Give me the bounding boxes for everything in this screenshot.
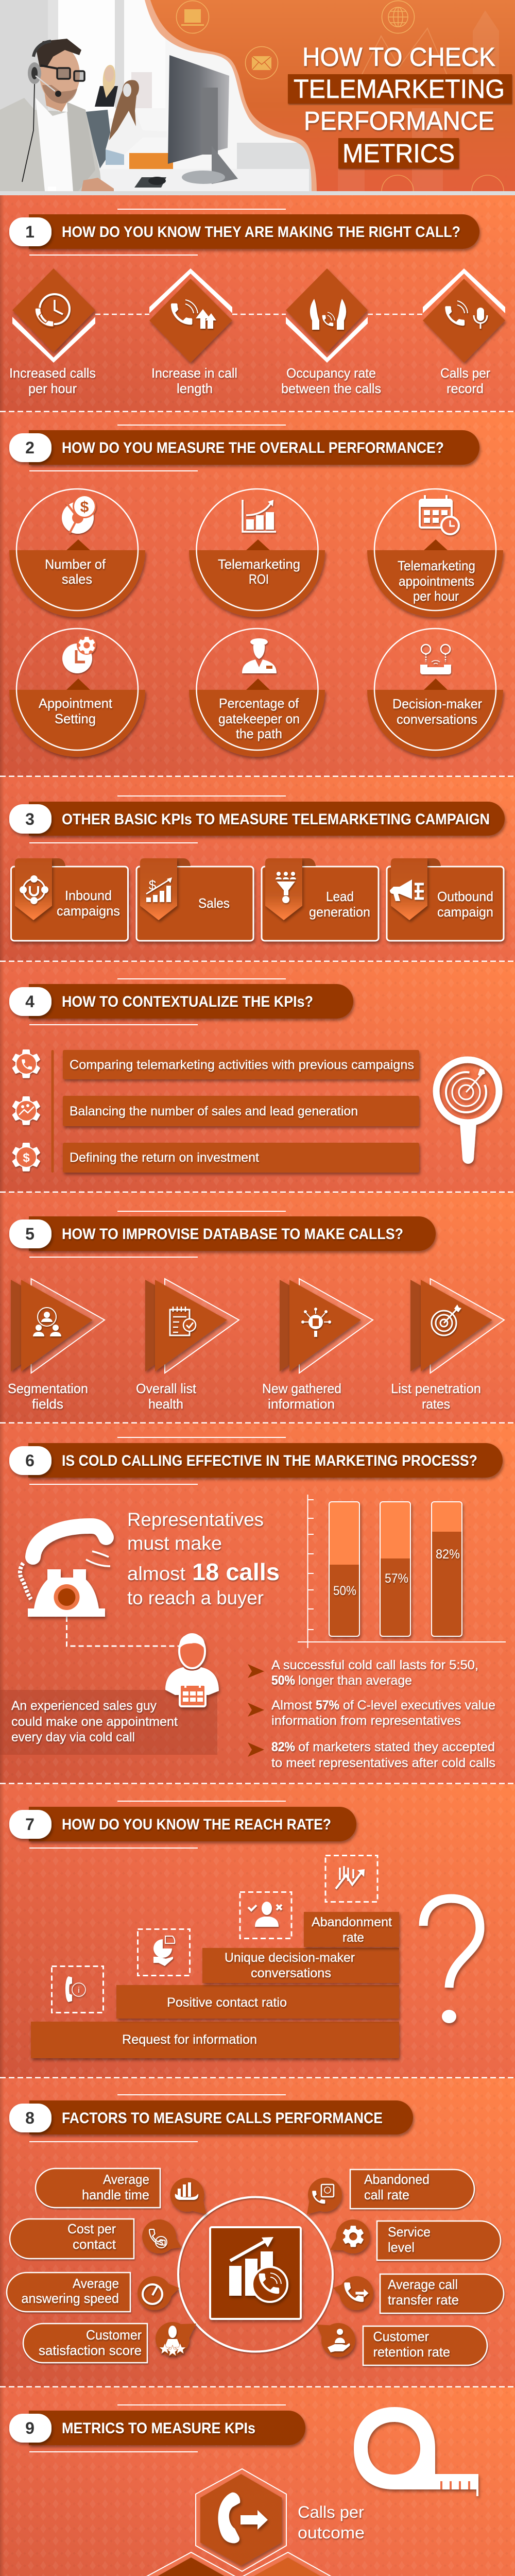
bar chart: cold call stats — [298, 1495, 506, 1648]
factor: customer retention rate: retention rate — [373, 2344, 450, 2360]
icon: envelope badge — [245, 46, 278, 79]
fact: marketers accepted meetings: 82% — [271, 1740, 295, 1754]
icon: gear and wrench — [330, 2219, 370, 2253]
hexagon: calls per outcome: Calls per — [298, 2503, 364, 2521]
callout text: 18 calls to reach a buyer: must make — [127, 1533, 222, 1554]
icon: gear with phone — [12, 1049, 40, 1078]
callout text: 18 calls to reach a buyer: Representatives — [127, 1509, 264, 1530]
item: segmentation fields: Segmentation — [8, 1381, 88, 1396]
item: list penetration rates — [391, 1279, 504, 1412]
card: outbound campaign: Outbound — [437, 889, 493, 904]
bar: 50%: 50% — [333, 1584, 356, 1598]
list item: defining return on investment: Defining the return on investment — [70, 1150, 259, 1165]
item: calls per record: record — [447, 381, 484, 396]
heading 4: 4 — [25, 992, 35, 1011]
orange wave panel — [145, 0, 515, 191]
title: PERFORMANCE — [304, 106, 494, 135]
heading 7: HOW DO YOU KNOW THE REACH RATE? — [62, 1816, 331, 1833]
step: request for information: Request for information — [122, 2032, 257, 2047]
item: increased calls per hour: per hour — [28, 381, 77, 396]
icon: rising chart — [243, 500, 276, 532]
icon: hand holding person — [317, 2323, 355, 2357]
icon: lead funnel — [276, 872, 296, 903]
step: unique decision-maker conversations: conversations — [251, 1966, 331, 1980]
factor: service level: Service — [388, 2224, 431, 2240]
card: appointment setting: Appointment — [39, 696, 113, 711]
panel: section 5 improvise database — [0, 1193, 515, 1423]
factor: cost per contact: Cost per — [67, 2221, 116, 2236]
panel: section 9 metrics — [0, 2387, 515, 2576]
factor: cost per contact — [10, 2219, 181, 2259]
centre circle with chart and phone — [178, 2197, 333, 2351]
card: number of sales — [9, 489, 145, 617]
icon: bars and phone — [229, 2237, 287, 2302]
callout text: 18 calls to reach a buyer: almost — [127, 1563, 186, 1584]
item: increase in call length: Increase in call — [151, 365, 237, 381]
callout panel: experienced sales guy: every day via cold call — [11, 1730, 135, 1744]
step: abandonment rate — [304, 1856, 399, 1947]
fact: successful cold call: A successful cold call lasts for 5:50, — [271, 1658, 478, 1672]
item: increase in call length: length — [177, 381, 213, 396]
factor: customer satisfaction score: Customer — [86, 2327, 142, 2343]
heading 6: 6 — [25, 1451, 35, 1470]
item: occupancy rate — [281, 268, 381, 396]
callout panel: experienced sales guy: could make one appointment — [11, 1715, 178, 1729]
title: TELEMARKETING — [294, 74, 505, 104]
heading 3: 3 — [25, 810, 35, 828]
heading 5: HOW TO IMPROVISE DATABASE TO MAKE CALLS? — [62, 1226, 403, 1243]
item: overall list health: health — [148, 1396, 183, 1412]
hexagon: call to close ratio — [242, 2552, 421, 2576]
item: overall list health — [136, 1279, 239, 1412]
icon: measuring tape — [354, 2407, 478, 2496]
icon: phone with arrow — [218, 2493, 268, 2543]
icon: speedometer — [138, 2276, 179, 2310]
step: abandonment rate: Abandonment — [312, 1915, 392, 1929]
heading 7: 7 — [25, 1815, 35, 1834]
header banner — [0, 0, 515, 191]
card: telemarketing appointments per hour: appointments — [399, 573, 474, 589]
heading 6 — [9, 1437, 503, 1484]
factor: average call transfer rate: transfer rate — [388, 2292, 459, 2308]
heading 8: 8 — [25, 2109, 35, 2127]
icon: rotary telephone — [20, 1526, 110, 1617]
item: increased calls per hour — [9, 268, 96, 396]
fact: successful cold call — [248, 1658, 478, 1688]
callout text: 18 calls to reach a buyer — [127, 1509, 280, 1608]
list item: balancing sales and lead generation: Balancing the number of sales and lead generation — [70, 1104, 358, 1118]
item: increased calls per hour: Increased calls — [9, 365, 96, 381]
list item: comparing activities: Comparing telemarketing activities with previous campaigns — [70, 1058, 414, 1072]
icon: clock and gear — [62, 635, 96, 673]
heading 9: 9 — [25, 2419, 35, 2437]
fact: C-level executives — [248, 1698, 495, 1728]
panel: section 1 right call — [0, 195, 515, 412]
panel: section 6 cold calling — [0, 1423, 515, 1784]
card: appointment setting — [9, 629, 145, 757]
fact: successful cold call: 50% — [271, 1673, 295, 1688]
icon: decision makers on phone — [420, 645, 451, 674]
icon: calendar and clock — [420, 495, 459, 534]
icon: phone with rising arrows — [171, 300, 216, 329]
card: appointment setting: Setting — [55, 711, 96, 726]
heading 8 — [9, 2095, 413, 2142]
item: segmentation fields — [8, 1279, 105, 1412]
item: calls per record — [423, 268, 505, 396]
title: HOW TO CHECK — [302, 42, 495, 72]
card: sales: Sales — [198, 895, 230, 911]
icon: magnifier with target — [436, 1060, 499, 1164]
bar: 57% — [380, 1502, 410, 1636]
card: percentage of gatekeeper on the path: the path — [236, 726, 282, 741]
heading 6: IS COLD CALLING EFFECTIVE IN THE MARKETING PROCESS? — [62, 1452, 477, 1469]
callout panel: experienced sales guy: An experienced sales guy — [11, 1699, 157, 1713]
icon: falling chart in dashed box — [325, 1856, 377, 1902]
bar: 82% — [432, 1502, 462, 1636]
heading 3 — [9, 796, 505, 843]
factor: average handle time: handle time — [82, 2187, 149, 2202]
fact: C-level executives: information from representatives — [271, 1714, 461, 1728]
decorative chart lines — [338, 10, 499, 191]
callout panel: experienced sales guy — [0, 1690, 217, 1755]
photo: call centre agent at desk — [0, 0, 319, 191]
icon: info phone in dashed box: i — [78, 1986, 80, 1995]
card: outbound campaign: campaign — [437, 904, 493, 920]
icon: target — [432, 1304, 461, 1335]
hexagon: calls per outcome — [196, 2469, 365, 2571]
bar: 57%: 57% — [385, 1571, 408, 1586]
heading 1 — [9, 209, 479, 255]
icon: hands and phone — [310, 299, 346, 330]
icon: pie and handshake in dashed box — [138, 1929, 190, 1975]
icon: hand and bars — [170, 2178, 206, 2214]
icon: gear with people chart — [12, 1096, 40, 1125]
card: decision-maker conversations: Decision-maker — [392, 696, 482, 711]
fact: C-level executives: 57% — [316, 1698, 339, 1713]
factor: customer retention rate — [317, 2323, 487, 2365]
icon: checklist — [170, 1307, 196, 1335]
factor: service level — [330, 2219, 501, 2260]
icon: phone with smile bubble — [307, 2178, 342, 2214]
item: calls per record: Calls per — [440, 365, 490, 381]
icon: pie and dollar — [62, 495, 96, 534]
icon: phone and clock — [35, 294, 70, 327]
card: telemarketing ROI: Telemarketing — [218, 556, 300, 572]
heading 1: 1 — [25, 223, 35, 241]
card: sales — [136, 858, 253, 941]
icon: dollar and bars: $ — [149, 877, 157, 893]
heading 8: FACTORS TO MEASURE CALLS PERFORMANCE — [62, 2110, 383, 2127]
card: lead generation: generation — [309, 904, 370, 920]
factor: abandoned call rate: Abandoned — [364, 2172, 430, 2187]
heading 4 — [9, 979, 353, 1025]
factor: abandoned call rate — [307, 2170, 474, 2214]
card: inbound campaigns — [11, 858, 128, 941]
icon: target people — [33, 1308, 61, 1336]
fact: marketers accepted meetings — [248, 1740, 495, 1770]
factor: average answering speed — [7, 2273, 179, 2312]
item: new gathered information: information — [268, 1396, 335, 1412]
callout text: 18 calls to reach a buyer: to reach a buyer — [127, 1587, 264, 1608]
card: lead generation: Lead — [326, 889, 354, 904]
factor: average call transfer rate: Average call — [388, 2277, 458, 2292]
factor: cost per contact: $ — [159, 2239, 164, 2247]
factor: average answering speed: answering speed — [22, 2291, 119, 2306]
item: occupancy rate: between the calls — [281, 381, 381, 396]
icon: inbound magnet — [20, 875, 48, 904]
icon: megaphone — [390, 879, 424, 901]
title — [288, 42, 512, 168]
factor: customer retention rate: Customer — [373, 2329, 429, 2344]
icon: laptop badge — [176, 1, 209, 33]
heading 7 — [9, 1801, 356, 1848]
heading 2: 2 — [25, 438, 35, 457]
heading 5: 5 — [25, 1225, 35, 1243]
heading 2 — [9, 425, 479, 471]
icon: phone transfer — [333, 2276, 373, 2310]
icon: globe badge — [382, 1, 414, 33]
factor: cost per contact: contact — [73, 2236, 116, 2252]
factor: abandoned call rate: call rate — [364, 2187, 409, 2202]
card: telemarketing ROI: ROI — [249, 571, 269, 587]
step: unique decision-maker conversations: Unique decision-maker — [225, 1951, 355, 1965]
step: request for information — [31, 1966, 399, 2058]
item: increase in call length — [149, 268, 237, 396]
item: segmentation fields: fields — [32, 1396, 63, 1412]
factor: average answering speed: Average — [73, 2276, 119, 2291]
list item: balancing sales and lead generation — [12, 1096, 419, 1126]
bar: 50% — [329, 1502, 359, 1636]
icon: gear with dollar: $ — [23, 1151, 30, 1165]
panel: section 2 overall performance — [0, 412, 515, 776]
step: positive contact ratio — [116, 1929, 399, 2019]
card: percentage of gatekeeper on the path — [189, 629, 325, 757]
panel: section 3 basic KPIs — [0, 777, 515, 961]
icon: dollar and bars — [146, 877, 172, 902]
icon: person with stars — [156, 2322, 196, 2356]
icon: info phone in dashed box — [52, 1966, 103, 2012]
heading 1: HOW DO YOU KNOW THEY ARE MAKING THE RIGHT CALL? — [62, 224, 460, 241]
card: telemarketing ROI — [189, 489, 325, 617]
hexagon: calls per outcome: outcome — [298, 2523, 365, 2542]
factor: average handle time: Average — [103, 2172, 149, 2187]
icon: question mark — [423, 1899, 480, 2023]
factor: service level: level — [388, 2240, 415, 2255]
fact: C-level executives: Almost — [271, 1698, 312, 1713]
icon: phone and dollar — [142, 2219, 181, 2253]
icon: person with check and cross in dashed box — [240, 1892, 291, 1938]
panel: section 8 factors — [0, 2078, 515, 2387]
step: positive contact ratio: Positive contact ratio — [167, 1995, 287, 2010]
item: list penetration rates: rates — [422, 1396, 450, 1412]
heading 2: HOW DO YOU MEASURE THE OVERALL PERFORMANCE? — [62, 439, 444, 456]
card: inbound campaigns: Inbound — [65, 888, 112, 903]
fact: successful cold call: longer than average — [298, 1673, 412, 1688]
heading 4: HOW TO CONTEXTUALIZE THE KPIs? — [62, 993, 313, 1010]
icon: person with calendar — [165, 1634, 219, 1706]
fact: marketers accepted meetings: of marketers stated they accepted — [298, 1740, 495, 1754]
factor: customer satisfaction score — [23, 2322, 196, 2363]
factor: average call transfer rate — [333, 2274, 504, 2313]
card: telemarketing appointments per hour: Telemarketing — [398, 558, 475, 573]
fact: marketers accepted meetings: to meet representatives after cold calls — [271, 1756, 495, 1770]
bar: 82%: 82% — [436, 1547, 460, 1562]
icon: pie and dollar: $ — [80, 499, 89, 516]
step: abandonment rate: rate — [342, 1930, 364, 1945]
card: number of sales: Number of — [45, 556, 106, 572]
item: list penetration rates: List penetration — [391, 1381, 481, 1396]
icon: bulb with document — [301, 1308, 331, 1337]
item: new gathered information — [262, 1279, 373, 1412]
panel: section 4 contextualize — [0, 962, 515, 1192]
item: new gathered information: New gathered — [262, 1381, 341, 1396]
fact: C-level executives: of C-level executives value — [343, 1698, 495, 1713]
card: number of sales: sales — [62, 571, 92, 587]
hexagon: lead conversion rates — [11, 2552, 236, 2576]
heading 9: METRICS TO MEASURE KPIs — [62, 2420, 255, 2437]
heading 5 — [9, 1211, 436, 1257]
item: overall list health: Overall list — [136, 1381, 197, 1396]
heading 9 — [9, 2405, 305, 2452]
title: METRICS — [342, 139, 455, 168]
icon: gear with dollar — [12, 1143, 40, 1172]
callout text: 18 calls to reach a buyer: 18 calls — [192, 1558, 280, 1585]
step: unique decision-maker conversations — [202, 1892, 399, 1983]
card: decision-maker conversations — [367, 629, 503, 757]
card: telemarketing appointments per hour — [367, 489, 503, 617]
list item: defining return on investment — [12, 1143, 419, 1173]
item: occupancy rate: Occupancy rate — [286, 365, 376, 381]
panel: section 7 reach rate — [0, 1784, 515, 2078]
card: decision-maker conversations: conversations — [397, 711, 477, 727]
card: percentage of gatekeeper on the path: Percentage of — [219, 696, 299, 711]
factor: average handle time — [36, 2168, 206, 2214]
card: percentage of gatekeeper on the path: gatekeeper on — [218, 711, 300, 726]
icon: phone and microphone — [445, 301, 487, 329]
card: inbound campaigns: campaigns — [57, 903, 120, 919]
factor: customer satisfaction score: satisfaction score — [39, 2343, 142, 2358]
card: telemarketing appointments per hour: per hour — [413, 588, 459, 604]
icon: gatekeeper officer — [242, 638, 277, 673]
card: outbound campaign — [387, 858, 504, 941]
list item: comparing activities — [12, 1049, 419, 1079]
card: lead generation — [262, 858, 379, 941]
